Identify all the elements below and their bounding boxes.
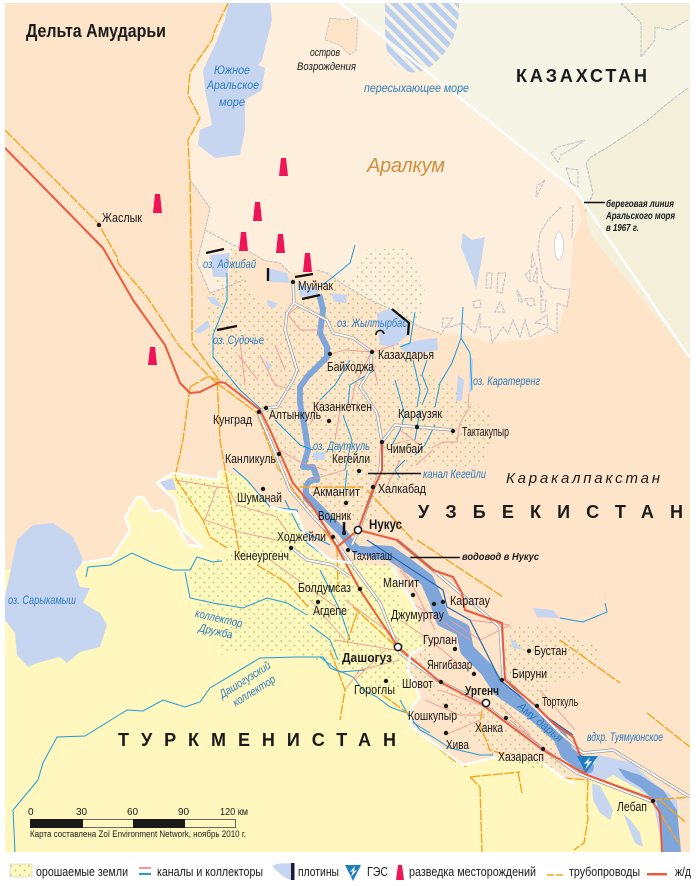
city labels: Нукус <box>369 517 402 532</box>
city labels: Канликуль <box>225 452 276 466</box>
water labels: оз. Судочье <box>213 335 264 347</box>
city labels: Шуманай <box>237 491 282 505</box>
legend: exploration: разведка месторождений <box>409 865 536 879</box>
scale bar: Карта составлена Zoï Environment Network, ноябрь 2010 г. <box>30 829 246 839</box>
legend: irrigated lands: орошаемые земли <box>36 865 128 879</box>
Tuyamuyun reservoir <box>589 755 678 838</box>
scale bar: 0 <box>28 807 34 818</box>
map title: Дельта Амударьи <box>26 21 166 41</box>
country labels: УЗБЕКИСТАН <box>418 502 683 522</box>
water labels: Дашогузский <box>216 660 274 702</box>
scale bar <box>28 807 248 839</box>
black italic notes: Аральского моря <box>605 211 675 222</box>
city labels: Хива <box>446 738 469 752</box>
legend: hydro power: ГЭС <box>367 865 388 879</box>
dried Aral seabed <box>188 3 582 343</box>
water labels: море <box>219 97 245 109</box>
city labels: Гороглы <box>354 683 395 697</box>
legend: dams <box>272 863 339 880</box>
city labels: Алтынкуль <box>269 408 321 422</box>
country labels: Аралкум <box>366 155 445 177</box>
legend: railway: ж/д <box>675 865 692 879</box>
Amu Darya channel <box>300 297 681 852</box>
irrigated lands: Khorezm and Dashoguz <box>175 470 575 775</box>
city labels: Джумуртау <box>391 608 445 622</box>
railway <box>5 148 662 852</box>
city labels: Шовот <box>402 677 433 691</box>
city labels: Каратау <box>450 594 491 608</box>
city labels: Торткуль <box>542 695 578 709</box>
legend: hydro power <box>345 865 388 881</box>
country labels: Каракалпакстан <box>506 470 660 487</box>
water labels: Южное <box>214 65 250 77</box>
city labels: Казанкеткен <box>313 400 372 414</box>
city labels: Тактакупыр <box>462 425 509 439</box>
city labels: Дашогуз <box>342 650 392 665</box>
city labels: Кунград <box>213 413 253 427</box>
city labels <box>102 211 647 814</box>
city labels: Акмангит <box>313 485 360 499</box>
water labels: Аму дарья <box>514 700 565 745</box>
hydro power station icon <box>577 756 598 773</box>
black italic notes <box>297 47 675 563</box>
city labels: Караузяк <box>398 407 442 421</box>
hatched drying sea <box>385 3 459 72</box>
city labels: Кенеургенч <box>234 549 289 563</box>
legend: irrigated lands <box>10 864 128 879</box>
irrigated lands: right bank <box>503 623 603 707</box>
city labels: Мангит <box>383 576 419 590</box>
leader lines <box>368 202 605 558</box>
lake: Southern Aral <box>198 3 272 158</box>
reservoir south lakes <box>592 783 643 847</box>
black italic notes: водовод в Нукус <box>462 552 539 563</box>
scale bar: 90 <box>178 807 190 818</box>
Aral lakes in delta <box>160 233 560 650</box>
water labels: оз. Жылтырбас <box>337 318 407 330</box>
legend: canals and collectors: каналы и коллекторы <box>157 865 263 879</box>
Turkmenistan <box>5 470 663 852</box>
city labels: Лебап <box>617 800 647 814</box>
water labels: коллектор <box>194 608 244 630</box>
city labels: Чимбай <box>386 442 423 456</box>
city labels: Гурлан <box>423 633 457 647</box>
exploration sites <box>148 158 312 365</box>
water labels: Дружба <box>196 622 234 642</box>
city labels: Водник <box>318 509 351 523</box>
water labels: коллектор <box>231 673 278 709</box>
city labels: Бируни <box>512 667 547 681</box>
water pipeline to Nukus <box>367 540 573 735</box>
city labels: Халкабад <box>378 482 427 496</box>
island Vozrozhdeniya <box>325 17 358 55</box>
city labels: Ханка <box>475 721 503 735</box>
legend: pipelines <box>547 865 640 879</box>
water labels: Аральское <box>206 80 259 92</box>
dams <box>206 249 409 533</box>
legend: pipelines: трубопроводы <box>569 865 640 879</box>
water labels: оз. Аджибай <box>203 259 256 271</box>
roads <box>258 282 690 802</box>
legend: dams: плотины <box>298 865 339 879</box>
scale bar: 60 <box>127 807 139 818</box>
city labels: Тахиаташ <box>352 549 392 563</box>
city labels: Агдепе <box>313 604 347 618</box>
city labels: Хазарасп <box>498 750 544 764</box>
borders <box>82 3 690 785</box>
city labels: Жаслык <box>102 211 142 225</box>
black italic notes: остров <box>310 47 340 59</box>
collectors <box>13 245 607 852</box>
water labels: оз. Сарыкамыш <box>8 595 76 607</box>
water labels: пересыхающее море <box>364 83 469 95</box>
water labels: оз. Каратеренг <box>473 376 540 388</box>
white salt lake <box>554 232 564 260</box>
country labels: КАЗАХСТАН <box>516 66 647 86</box>
legend: railway <box>647 865 692 879</box>
Kazakhstan east of 1967 shoreline <box>585 88 690 358</box>
city labels: Казахдарья <box>378 348 434 362</box>
city labels: Ургенч <box>465 684 499 698</box>
water labels: вдхр. Туямуюнское <box>587 732 663 744</box>
1967 shoreline dashes <box>190 3 688 343</box>
water labels: канал Кегейли <box>423 469 486 481</box>
city labels: Кошкупыр <box>408 709 457 723</box>
cities <box>97 223 655 803</box>
city labels: Кегейли <box>332 452 370 466</box>
Kazakhstan north islands <box>621 3 690 57</box>
black italic notes: в 1967 г. <box>606 223 639 234</box>
canals <box>175 305 575 745</box>
irrigated lands: delta <box>205 243 490 530</box>
water labels <box>8 65 663 745</box>
country labels <box>118 66 683 750</box>
black italic notes: береговая линия <box>606 198 674 210</box>
city labels: Болдумсаз <box>298 581 351 595</box>
city labels: Бустан <box>534 644 567 658</box>
black italic notes: Возрождения <box>297 61 356 73</box>
water labels: оз. Дауткуль <box>313 441 370 453</box>
legend <box>10 863 692 881</box>
scale bar: 120 км <box>220 807 248 818</box>
scale bar: 30 <box>76 807 88 818</box>
country labels: ТУРКМЕНИСТАН <box>118 730 396 750</box>
Kazakhstan <box>342 3 690 205</box>
city labels: Ходжейли <box>277 530 326 544</box>
city labels: Янгибазар <box>427 658 472 672</box>
city labels: Байходжа <box>327 360 374 374</box>
city labels: Муйнак <box>298 279 333 293</box>
lake: Sarykamysh <box>5 523 107 667</box>
